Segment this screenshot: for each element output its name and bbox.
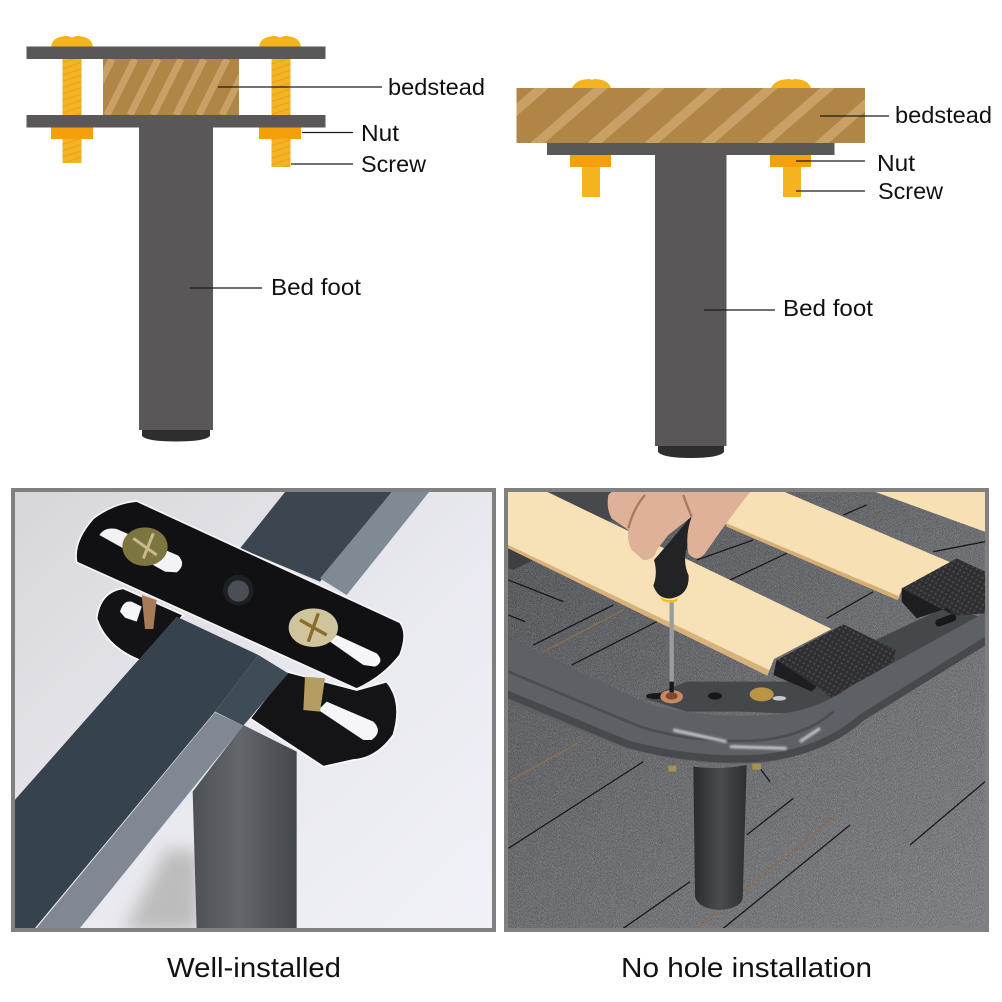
label: screw — [291, 151, 426, 177]
label: screw: Screw — [361, 151, 426, 177]
label: bedstead: bedstead — [388, 74, 485, 100]
lower bracket slots — [120, 601, 378, 740]
left screw head — [572, 79, 611, 88]
upper steel bracket — [76, 501, 404, 689]
label: nut — [796, 150, 916, 176]
bed foot leg — [655, 155, 726, 446]
label: bed foot: Bed foot — [271, 274, 362, 300]
inner flange — [645, 607, 985, 715]
icon: right screw — [259, 36, 301, 167]
lower steel bracket — [97, 588, 397, 767]
bed foot — [668, 764, 761, 910]
panel: well-installed photo — [10, 485, 500, 935]
upper beam — [240, 490, 431, 595]
diagram: no-hole bed foot installation — [475, 79, 992, 458]
wood bedstead block — [103, 59, 239, 115]
floor shadow — [123, 848, 200, 932]
caption: well-installed: Well-installed — [167, 952, 341, 983]
bed foot — [193, 725, 297, 930]
steel plate — [547, 143, 834, 155]
diagram: through-hole bed foot installation — [26, 36, 485, 442]
label: nut — [302, 120, 400, 146]
label: nut: Nut — [361, 120, 400, 146]
right nut and screw — [770, 155, 811, 197]
left nut — [51, 128, 93, 139]
screwdriver — [653, 515, 692, 692]
rubber foot pad — [142, 430, 210, 442]
lower beam — [13, 617, 288, 930]
rear frame strip — [550, 492, 612, 522]
label: nut: Nut — [877, 150, 916, 176]
wooden slat 1 — [505, 490, 832, 676]
upper steel plate — [26, 46, 326, 59]
label: bedstead: bedstead — [895, 102, 992, 128]
left nut and screw — [570, 155, 611, 197]
label: screw: Screw — [878, 178, 943, 204]
right screw head — [771, 79, 811, 88]
right nut — [259, 128, 301, 139]
rubber pad rear — [902, 558, 987, 627]
screw heads — [122, 527, 338, 647]
panel: no-hole installation photo — [500, 485, 1000, 935]
lower steel plate — [26, 115, 326, 128]
mounting screws — [646, 687, 786, 703]
label: bed foot: Bed foot — [783, 295, 874, 321]
curved steel frame tube — [505, 612, 987, 764]
wood bedstead board — [516, 88, 865, 143]
bed foot leg — [139, 127, 213, 430]
rubber foot pad — [658, 446, 724, 458]
icon: left screw — [51, 36, 93, 163]
rubber pad front — [773, 624, 896, 699]
carpet floor — [500, 485, 1000, 935]
screw shanks — [142, 595, 325, 712]
hand — [608, 490, 752, 560]
wooden slat 2 — [720, 490, 951, 600]
caption: no hole installation: No hole installation — [621, 952, 872, 983]
wooden slat 3 — [876, 492, 985, 532]
